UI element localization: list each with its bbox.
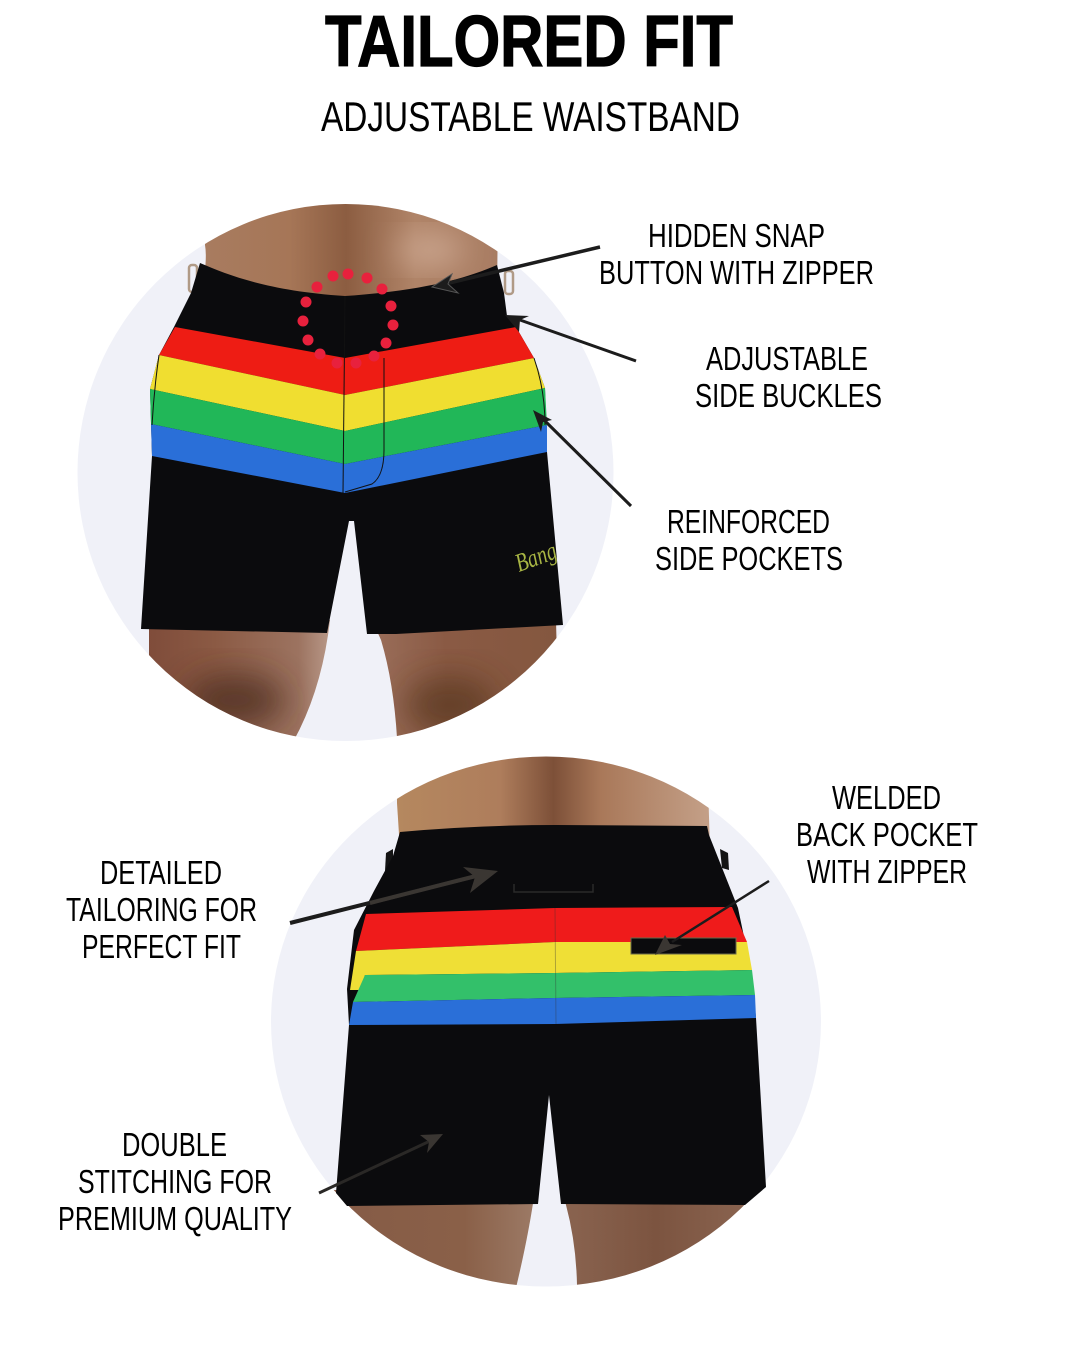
model skin: back torso and legs	[334, 756, 744, 1285]
buckles: back	[385, 849, 729, 871]
label: detailed tailoring: TAILORING FOR	[66, 891, 257, 928]
label: reinforced side pockets	[655, 503, 843, 577]
arrow: adjustable side buckles	[505, 315, 636, 361]
center seam	[555, 908, 556, 1024]
fly and pocket stitching: front	[152, 296, 545, 493]
shorts body: back	[336, 825, 766, 1206]
arrow: double stitching	[319, 1134, 443, 1193]
welded back pocket with zipper	[631, 938, 736, 954]
label: welded back pocket	[796, 779, 978, 890]
label: double stitching: PREMIUM QUALITY	[58, 1200, 292, 1237]
label: hidden snap button	[599, 217, 874, 291]
waistband pocket detail	[514, 884, 593, 892]
background circle: back	[271, 756, 821, 1286]
label: adjustable side buckles: ADJUSTABLE	[706, 340, 868, 377]
label: detailed tailoring: DETAILED	[100, 854, 222, 891]
label: reinforced side pockets: REINFORCED	[667, 503, 830, 540]
title: TAILORED FIT	[325, 2, 733, 82]
label: adjustable side buckles	[695, 340, 882, 414]
arrow: detailed tailoring	[290, 867, 498, 923]
label: welded back pocket: WITH ZIPPER	[807, 853, 967, 890]
label: welded back pocket: WELDED	[832, 779, 941, 816]
panel: back view of shorts	[271, 750, 821, 1300]
model skin: front torso and legs	[120, 200, 557, 760]
shorts body: front	[141, 263, 563, 634]
label: welded back pocket: BACK POCKET	[796, 816, 978, 853]
rainbow stripes: front	[150, 327, 547, 493]
label: detailed tailoring: PERFECT FIT	[82, 928, 241, 965]
panel: front view of shorts	[78, 200, 614, 760]
label: double stitching: STITCHING FOR	[78, 1163, 272, 1200]
subtitle: ADJUSTABLE WAISTBAND	[321, 93, 740, 140]
rainbow stripes: back	[349, 907, 756, 1025]
highlight: dotted red circle	[298, 268, 398, 368]
label: double stitching: DOUBLE	[122, 1126, 227, 1163]
label: detailed tailoring	[66, 854, 257, 965]
buckles: front	[189, 265, 513, 294]
label: reinforced side pockets: SIDE POCKETS	[655, 540, 843, 577]
arrow: reinforced side pockets	[533, 410, 631, 506]
background circle: front	[78, 204, 614, 741]
label: hidden snap button: HIDDEN SNAP	[648, 217, 825, 254]
brand script: Bang: Bang	[511, 536, 561, 578]
arrow: hidden snap button	[432, 247, 600, 293]
label: double stitching	[58, 1126, 292, 1237]
arrow: welded back pocket	[655, 881, 769, 955]
label: hidden snap button: BUTTON WITH ZIPPER	[599, 254, 874, 291]
label: adjustable side buckles: SIDE BUCKLES	[695, 377, 882, 414]
